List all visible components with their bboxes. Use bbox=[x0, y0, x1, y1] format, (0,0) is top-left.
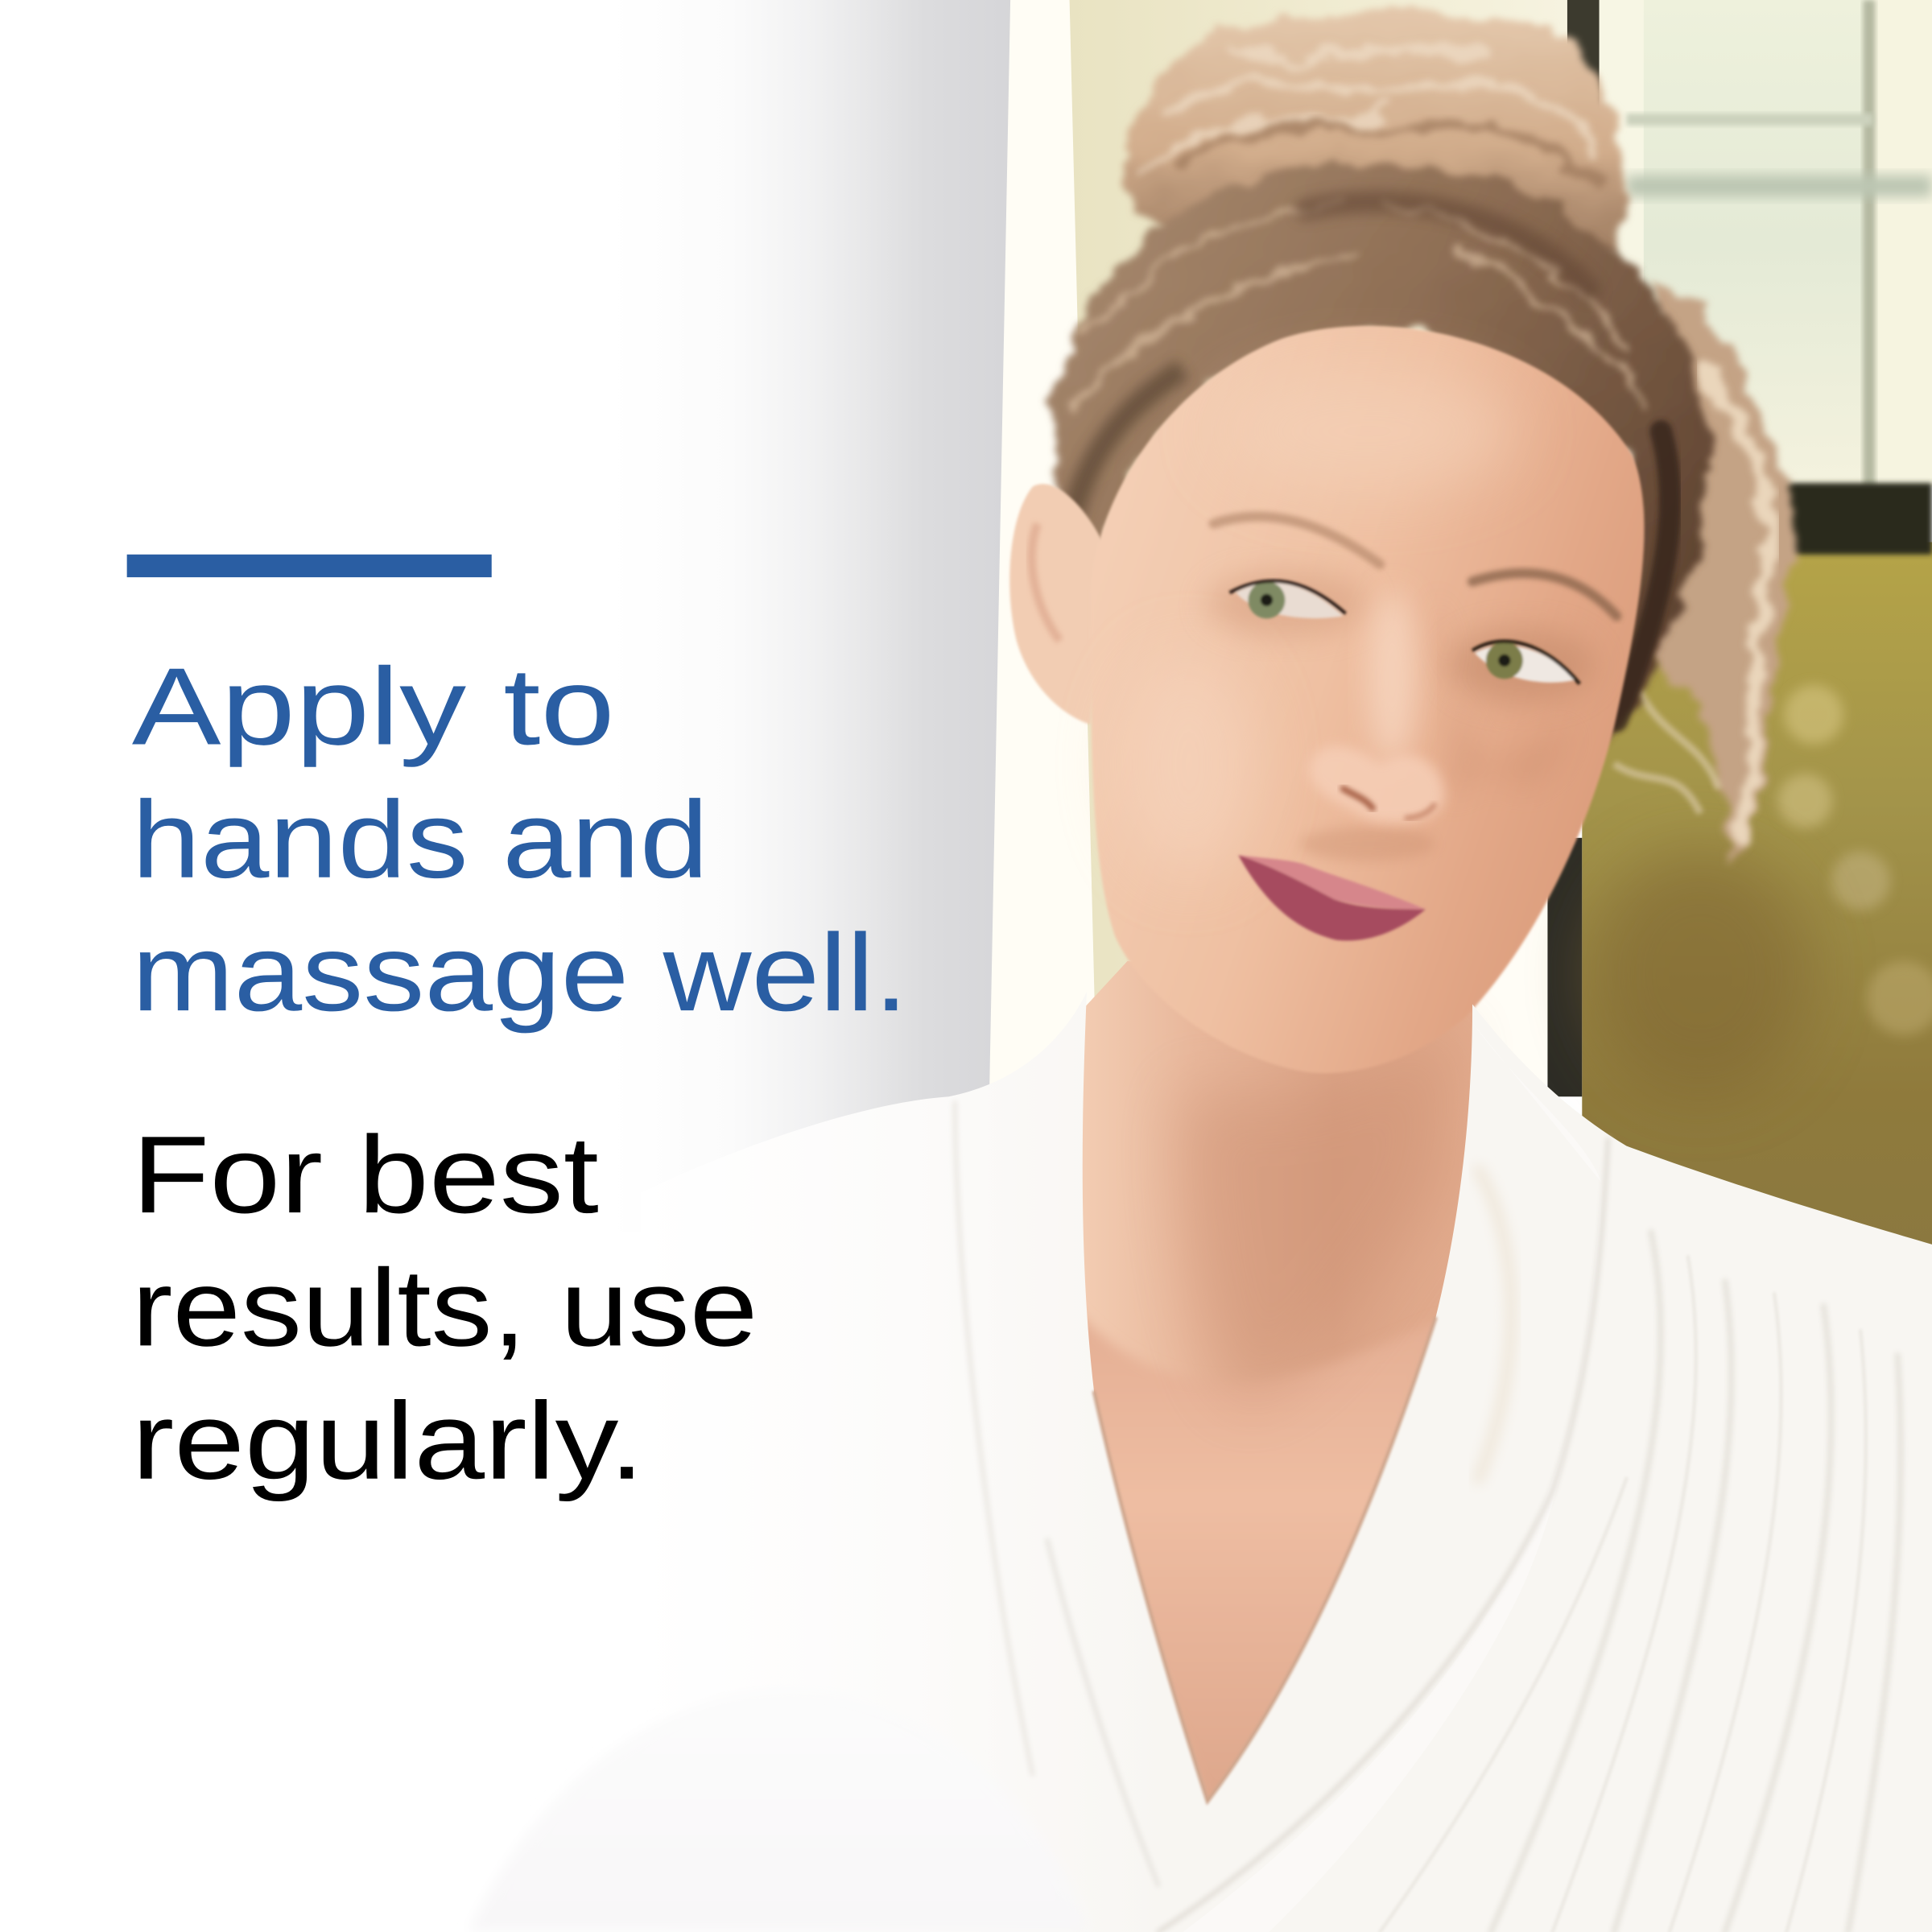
dark window frame bbox=[1567, 0, 1600, 487]
lapel highlight right bbox=[1183, 1022, 1602, 1932]
neck bbox=[1059, 961, 1516, 1823]
eye left bbox=[1230, 581, 1345, 618]
line 2: hands and bbox=[132, 778, 708, 901]
dark horizontal window bar bbox=[1700, 483, 1932, 555]
nose bbox=[1309, 746, 1444, 823]
curly hair lock right bbox=[1651, 277, 1792, 862]
line 3: regularly. bbox=[132, 1380, 645, 1502]
nose shadow bbox=[1435, 592, 1571, 801]
loose wisps bbox=[1614, 690, 1719, 813]
robe body bbox=[641, 992, 1932, 1932]
line 1: Apply to bbox=[132, 645, 615, 767]
chest bbox=[1072, 1306, 1442, 1823]
main hair mass bbox=[1050, 165, 1713, 770]
robe collar shadow and folds bbox=[955, 1022, 1901, 1932]
accent bar bbox=[127, 555, 492, 577]
heading: blue text bbox=[132, 645, 908, 1034]
upper lip shadow bbox=[1300, 827, 1435, 861]
hair bun bbox=[1126, 10, 1624, 258]
white window frame bbox=[989, 0, 1096, 1091]
pale wall section bbox=[1070, 0, 1567, 1084]
eye right bbox=[1472, 642, 1579, 683]
brow right bbox=[1472, 573, 1616, 616]
blurred white shape bottom bbox=[469, 1690, 1091, 1932]
cheek highlight bbox=[1121, 653, 1257, 875]
subheading: black text bbox=[132, 1113, 758, 1502]
line 3: massage well. bbox=[132, 911, 908, 1034]
lips bbox=[1238, 855, 1426, 940]
upper window panes bbox=[1600, 0, 1932, 487]
nose bridge highlight bbox=[1368, 592, 1417, 764]
face bbox=[1091, 326, 1645, 1073]
line 2: results, use bbox=[132, 1246, 758, 1368]
forehead highlight bbox=[1220, 369, 1516, 493]
garden view bbox=[1582, 542, 1932, 1282]
ear bbox=[1009, 484, 1103, 724]
brow left bbox=[1214, 517, 1380, 564]
wall gradient bbox=[0, 0, 1013, 1232]
woman bbox=[641, 10, 1932, 1932]
eye socket shadows bbox=[1208, 572, 1368, 636]
line 1: For best bbox=[132, 1113, 599, 1236]
background: window and wall bbox=[0, 0, 1932, 1282]
neck shadow bbox=[1180, 1022, 1454, 1405]
